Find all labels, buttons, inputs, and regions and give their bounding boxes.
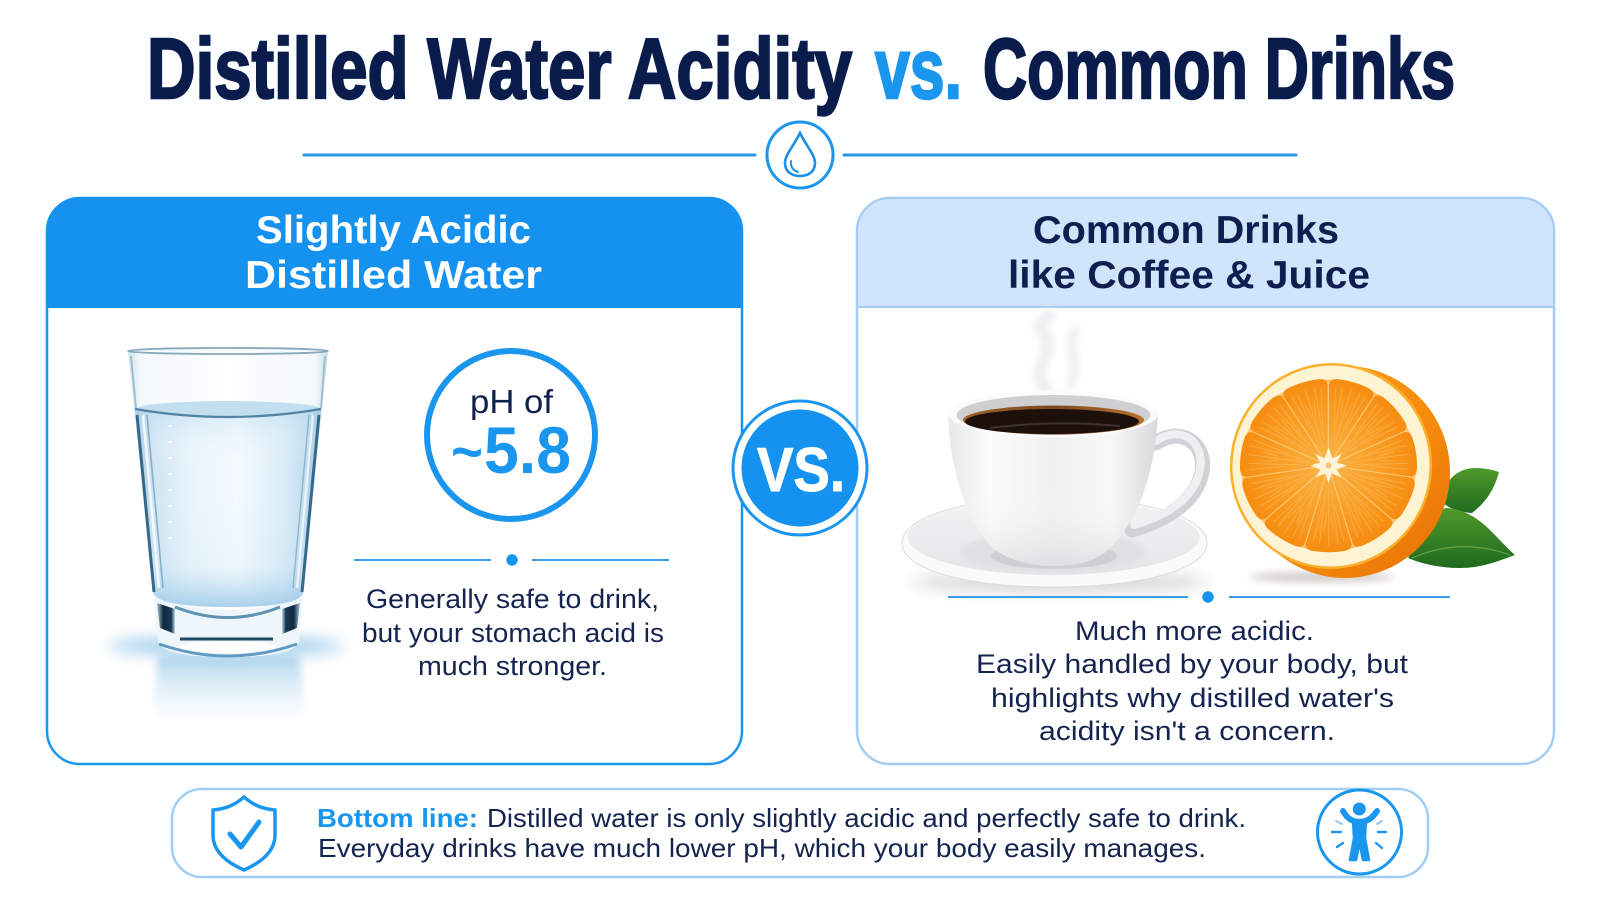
panel: common drinks xyxy=(857,198,1554,764)
left panel header: Slightly Acidic xyxy=(256,209,531,252)
left body text: much stronger. xyxy=(418,651,607,681)
bottom line text xyxy=(317,803,1246,863)
title xyxy=(147,22,1455,117)
illustration: steam xyxy=(1040,315,1076,390)
left body text xyxy=(362,584,664,681)
pH badge: pH of xyxy=(470,383,554,420)
panel: distilled water xyxy=(47,198,742,764)
bottom line text: Everyday drinks have much lower pH, which your body easily manages. xyxy=(318,833,1206,863)
title divider with water drop icon xyxy=(304,122,1296,188)
title: Distilled Water Acidity xyxy=(147,22,852,117)
right body text: highlights why distilled water's xyxy=(991,683,1394,713)
icon: shield with check xyxy=(213,797,275,870)
right body text: Easily handled by your body, but xyxy=(976,649,1409,679)
right body text xyxy=(976,616,1409,746)
illustration: coffee cup xyxy=(902,390,1210,590)
right body text: acidity isn't a concern. xyxy=(1039,716,1335,746)
right divider xyxy=(948,591,1450,603)
pH badge: 5.8 xyxy=(484,413,571,487)
icon: healthy person xyxy=(1318,790,1402,874)
illustration: leaves xyxy=(1408,468,1515,568)
right panel header xyxy=(857,198,1554,307)
VS badge xyxy=(733,401,867,535)
left body text: Generally safe to drink, xyxy=(366,584,659,614)
title: vs. xyxy=(875,22,962,117)
left divider xyxy=(354,554,669,566)
right panel header: like Coffee & Juice xyxy=(1008,254,1370,297)
VS badge: VS. xyxy=(757,436,845,505)
bottom line text: Bottom line: xyxy=(317,803,478,833)
right body text: Much more acidic. xyxy=(1075,616,1314,646)
left body text: but your stomach acid is xyxy=(362,618,664,648)
illustration: orange half xyxy=(1214,347,1450,585)
right panel header: Common Drinks xyxy=(1033,209,1339,252)
pH badge xyxy=(427,351,595,519)
left panel header: Distilled Water xyxy=(245,254,542,297)
left panel header xyxy=(47,198,742,308)
illustration: glass of water xyxy=(108,348,344,724)
pH badge: ~ xyxy=(451,420,483,485)
bottom line text: Distilled water is only slightly acidic and perfectly safe to drink. xyxy=(487,803,1246,833)
bottom line callout xyxy=(172,789,1428,877)
